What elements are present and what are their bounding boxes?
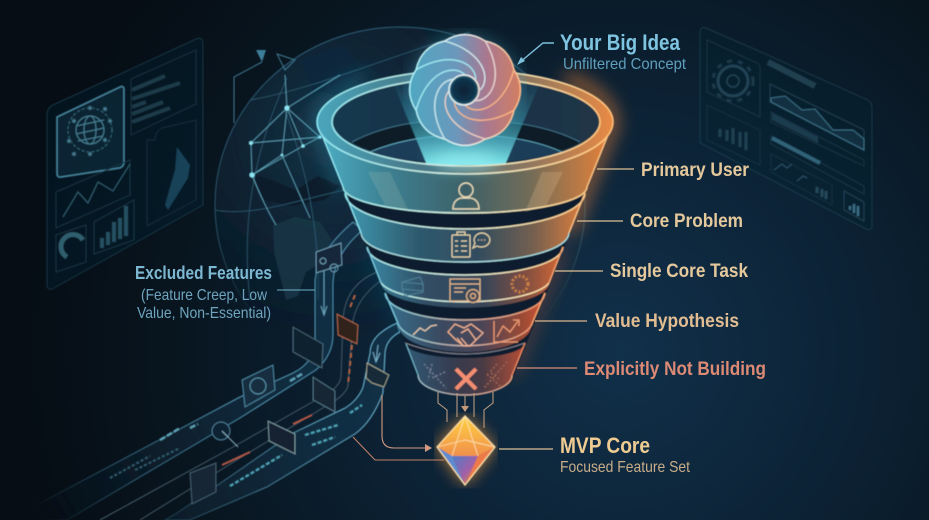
small bars tile (707, 105, 760, 165)
stream cards (190, 243, 389, 504)
globe (215, 27, 585, 383)
label: Single Core Task: Single Core Task (610, 260, 748, 282)
inner levels (352, 120, 580, 161)
label: Your Big Idea: Unfiltered Concept (563, 56, 687, 73)
funnel glow (318, 78, 612, 375)
icon: big idea swirl (409, 34, 521, 146)
excluded feature streams (33, 222, 400, 520)
donut tile (56, 225, 86, 272)
icon: growth chart (494, 320, 519, 342)
funnel band: Single Core Task (367, 247, 563, 308)
funnel body silhouette (317, 122, 613, 396)
stream: blue upper (33, 222, 363, 520)
label: Value Hypothesis: Value Hypothesis (595, 310, 739, 332)
funnel band: Core Problem (345, 193, 585, 262)
bar chart tile (94, 200, 134, 254)
label: MVP Core (499, 433, 690, 476)
funnel band: Explicitly Not Building (405, 343, 525, 395)
meridians and links (215, 32, 470, 300)
label: Excluded Features (135, 262, 315, 322)
label: Excluded Features: Excluded Features (135, 262, 272, 283)
icon: faded foliage right (484, 362, 507, 388)
icon: clipboard and speech bubble (452, 232, 490, 257)
label: MVP Core: MVP Core (560, 433, 650, 458)
label: Explicitly Not Building: Explicitly Not Building (584, 358, 766, 380)
funnel side edges (318, 125, 612, 326)
shard chart tile (147, 120, 196, 226)
icon: MVP gem (437, 416, 495, 485)
label: Your Big Idea: Your Big Idea (560, 30, 681, 55)
globe tile (57, 86, 124, 177)
funnel mouth (317, 70, 613, 174)
stream: blue lower (165, 323, 400, 520)
icon: orange cluster (512, 276, 528, 292)
funnel band: Primary User (318, 125, 612, 213)
stream: orange middle (100, 272, 382, 520)
icon: window and gear (450, 279, 480, 302)
flags (234, 50, 295, 123)
connectors into MVP gem (353, 392, 493, 460)
funnel (317, 70, 613, 396)
label: Excluded Features: (Feature Creep, Low (141, 287, 267, 304)
sparkline tiles (771, 154, 864, 221)
continents (273, 217, 332, 300)
label: Your Big Idea (517, 30, 687, 73)
text bars tile (131, 50, 196, 135)
label: MVP Core: Focused Feature Set (560, 459, 690, 476)
icon: faded foliage left (424, 364, 446, 388)
gear tile (707, 40, 760, 117)
label: Primary User: Primary User (641, 159, 749, 181)
icon: user (453, 183, 479, 209)
icon: crossed out (456, 369, 476, 389)
icon: box (402, 277, 423, 296)
funnel band: Value Hypothesis (385, 293, 545, 352)
icon: handshake (448, 324, 483, 346)
line chart and progress rows (768, 62, 864, 194)
line chart tile (56, 160, 130, 228)
network nodes (249, 105, 322, 178)
icon: squiggle (413, 325, 437, 335)
label: Excluded Features: Value, Non-Essential) (137, 305, 271, 322)
light beam (393, 83, 540, 165)
panel: left dashboard (47, 38, 203, 289)
label: Core Problem: Core Problem (630, 210, 743, 232)
panel: right dashboard (700, 28, 872, 230)
